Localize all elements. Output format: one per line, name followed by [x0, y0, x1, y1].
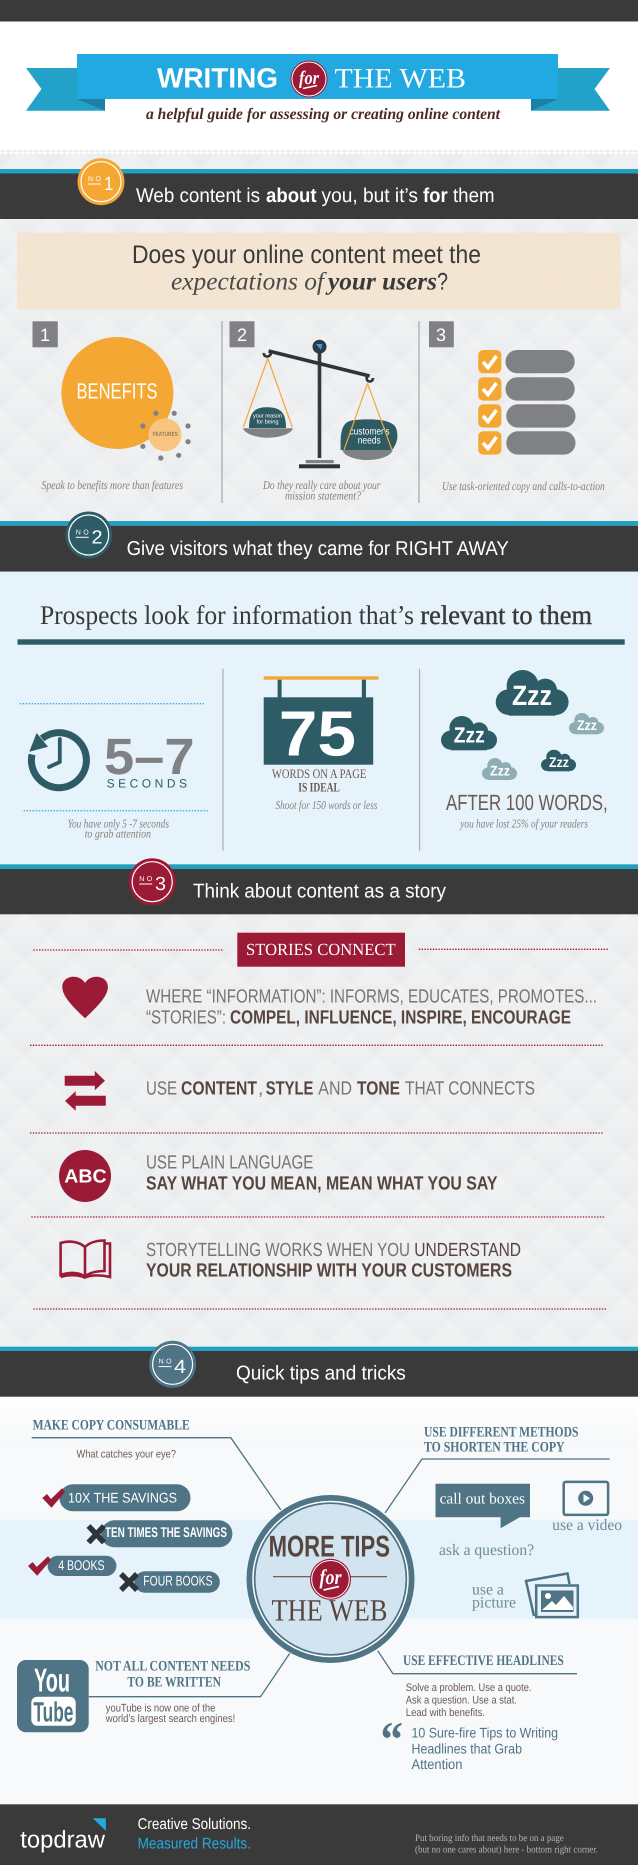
- title words: the web: THE WEB: [334, 64, 466, 94]
- badge: number 4: NO: [159, 1359, 172, 1366]
- badge: number 3: NO: [139, 876, 153, 883]
- question line 2: your users: [325, 268, 437, 296]
- body text: Lead with benefits.: [406, 1707, 485, 1719]
- panel: youtube: [17, 1659, 250, 1732]
- panel: beige question box: [17, 233, 621, 309]
- icon: small dark cloud: [541, 750, 576, 771]
- panel: section 1 background: [0, 154, 638, 524]
- section 4 heading: Quick tips and tricks: [236, 1362, 406, 1384]
- question line 2: expectations of: [171, 268, 327, 296]
- row: storytelling: [61, 1240, 521, 1282]
- tagline: Measured Results.: [138, 1835, 251, 1852]
- icon: heart: [62, 977, 108, 1018]
- section 2 heading: Give visitors what they came for RIGHT AWAY: [127, 538, 509, 560]
- label: [272, 766, 366, 795]
- text: ,: [258, 1078, 263, 1099]
- text: TONE: [357, 1078, 400, 1099]
- heading: [95, 1659, 250, 1690]
- icon: hanging sign: 75: [279, 698, 356, 770]
- dividers: [223, 669, 420, 851]
- right pan: customer's: [350, 426, 390, 437]
- heading: [424, 1425, 578, 1456]
- icon: mid cloud: [441, 716, 497, 750]
- panel: seconds: [20, 704, 209, 841]
- panel: effective headlines: [380, 1653, 564, 1772]
- section 1 heading: [136, 185, 494, 207]
- section 1 heading: for: [423, 185, 448, 207]
- number 3 box: [429, 321, 454, 347]
- tagline: Creative Solutions.: [138, 1816, 251, 1833]
- text: STORYTELLING WORKS WHEN YOU: [146, 1240, 410, 1261]
- title ribbon: [26, 54, 610, 111]
- panel: 75 words: [264, 676, 378, 812]
- section 1 heading: you, but it’s: [322, 185, 418, 207]
- question: What catches your eye?: [76, 1449, 176, 1461]
- badge: for: [290, 60, 328, 98]
- icon: big cloud: [496, 670, 569, 716]
- panel: clouds: [441, 670, 608, 830]
- icon: light cloud right: [569, 713, 604, 734]
- footer: [0, 1804, 638, 1865]
- question line 2: ?: [437, 268, 448, 296]
- section 3 header band: [0, 858, 638, 914]
- number 2 box: 2: [237, 325, 247, 345]
- text: THAT CONNECTS: [405, 1078, 535, 1099]
- badge: number 1: [78, 158, 124, 205]
- caption: You have only 5 -7 seconds: [68, 816, 169, 830]
- icon: video: [564, 1482, 608, 1515]
- stat: 5-7: 5–7: [104, 728, 194, 785]
- right pan: [341, 383, 397, 460]
- text: YOUR RELATIONSHIP WITH YOUR CUSTOMERS: [146, 1261, 512, 1282]
- icon: features circle with dots: FEATURES: [153, 431, 178, 438]
- section 2 rule: [18, 639, 625, 645]
- zigzag edge: [0, 150, 638, 154]
- left pan: for being: [256, 419, 278, 426]
- body text: [406, 1682, 532, 1719]
- pill: 4 books: 4 BOOKS: [58, 1557, 105, 1573]
- icon: open book: [61, 1240, 110, 1278]
- badge: number 3: 3: [155, 874, 166, 895]
- text: SAY WHAT YOU MEAN, MEAN WHAT YOU SAY: [146, 1173, 498, 1194]
- text: more tips: MORE TIPS: [269, 1531, 390, 1564]
- label: IS IDEAL: [298, 780, 340, 795]
- dotted dividers: [30, 1045, 607, 1309]
- body text: world’s largest search engines!: [105, 1713, 235, 1725]
- label: use a picture: use a: [472, 1581, 504, 1598]
- text: USE: [146, 1078, 177, 1099]
- icon: light cloud left: Zzz: [490, 762, 510, 778]
- text: the web: THE WEB: [272, 1592, 388, 1627]
- icon: youtube logo: [17, 1660, 89, 1732]
- panel: section 3 background: [0, 914, 638, 1347]
- icon: big cloud: Zzz: [512, 680, 552, 711]
- panel: benefits column: [32, 321, 191, 492]
- badge: number 4: 4: [174, 1357, 186, 1378]
- label: ask a question: ask a question?: [439, 1542, 534, 1559]
- label: use a picture: [472, 1581, 516, 1612]
- logo: topdraw: topdraw: [20, 1826, 106, 1853]
- number 1 box: [32, 321, 58, 347]
- question line 1: Does your online content meet the: [132, 241, 481, 269]
- pill: ten times the savings: [88, 1520, 232, 1547]
- caption: you have lost 25% of your readers: [460, 816, 588, 830]
- badge: number 3: [129, 858, 176, 905]
- badge: for: for: [299, 68, 320, 89]
- left pan: your reason: [253, 414, 282, 420]
- caption 2: [262, 478, 381, 502]
- icon: abc circle: ABC: [64, 1167, 107, 1188]
- text: “STORIES”:: [146, 1007, 226, 1028]
- icon: benefits circle: BENEFITS: [76, 378, 158, 403]
- heading: USE EFFECTIVE HEADLINES: [403, 1653, 564, 1669]
- section 3 heading: Think about content as a story: [193, 881, 446, 903]
- badge: for: for: [320, 1565, 342, 1589]
- title word: writing: WRITING: [157, 62, 278, 94]
- section 1 heading: them: [453, 185, 494, 207]
- icon: quote mark: “: [380, 1711, 403, 1767]
- section 1 heading: about: [266, 185, 317, 207]
- icon: small dark cloud: Zzz: [549, 754, 569, 770]
- quote text: Headlines that Grab: [412, 1740, 522, 1756]
- label: use a video: use a video: [552, 1517, 622, 1534]
- column dividers: [222, 321, 419, 503]
- pill: 10x the savings: 10X THE SAVINGS: [68, 1490, 177, 1506]
- section 4 header band: [0, 1341, 638, 1397]
- quote text: [412, 1725, 558, 1772]
- right pan: needs: [358, 435, 381, 446]
- icon: balance scale: [243, 340, 397, 468]
- heading: USE DIFFERENT METHODS: [424, 1425, 578, 1441]
- quote text: 10 Sure-fire Tips to Writing: [412, 1725, 558, 1741]
- section 1 header band: [0, 158, 638, 219]
- section 2 title: Prospects look for information that’s: [40, 600, 414, 630]
- icon: light cloud left: [482, 758, 517, 780]
- icon: exchange arrows: [65, 1071, 106, 1111]
- icon: picture frames: [526, 1574, 578, 1617]
- panel: checklist column: [429, 321, 605, 493]
- badge: number 2: 2: [92, 527, 102, 548]
- panel: scale column: [230, 321, 397, 502]
- left pan: [243, 358, 293, 438]
- section 2 header band: [0, 512, 638, 572]
- icon: abc circle: [59, 1150, 111, 1202]
- panel: make copy consumable: [28, 1417, 232, 1593]
- number 3 box: 3: [436, 325, 446, 345]
- text: CONTENT: [181, 1078, 257, 1099]
- caption 1: Speak to benefits more than features: [42, 478, 183, 492]
- heading: MAKE COPY CONSUMABLE: [33, 1417, 190, 1433]
- badge: for: [310, 1559, 351, 1600]
- badge: number 1: 1: [104, 174, 114, 195]
- question line 2: [171, 268, 448, 296]
- panel: section 2 background: [0, 572, 638, 864]
- caption: [68, 816, 169, 841]
- caption 2: Do they really care about your: [262, 478, 381, 492]
- heading: TO BE WRITTEN: [127, 1674, 221, 1690]
- row: content style tone: [65, 1071, 535, 1111]
- body text: Ask a question. Use a stat.: [406, 1694, 517, 1706]
- panel: center circle more tips: [246, 1495, 414, 1663]
- connector lines: [32, 1438, 610, 1697]
- caption 2: mission statement?: [285, 488, 361, 502]
- row: plain language: [59, 1150, 498, 1202]
- caption: to grab attention: [85, 827, 151, 841]
- number 2 box: [230, 321, 254, 347]
- badge: number 4: [149, 1341, 196, 1388]
- callout box: call out boxes: [440, 1491, 525, 1508]
- caption: Shoot for 150 words or less: [276, 798, 378, 812]
- text: [146, 1240, 521, 1282]
- icon: benefits circle: [61, 337, 173, 449]
- text: USE PLAIN LANGUAGE: [146, 1152, 313, 1173]
- top bar: [0, 0, 638, 22]
- label: seconds: SECONDS: [107, 777, 187, 791]
- pill: ten times the savings: TEN TIMES THE SAVINGS: [105, 1524, 227, 1540]
- heading: NOT ALL CONTENT NEEDS: [95, 1659, 250, 1675]
- icon: youtube logo: You: [34, 1662, 70, 1699]
- badge: number 1: NO: [88, 176, 102, 183]
- text: [146, 987, 597, 1028]
- tagline: [138, 1816, 251, 1852]
- body text: youTube is now one of the: [106, 1703, 215, 1715]
- badge: number 2: NO: [76, 529, 89, 536]
- panel: different methods: [424, 1425, 622, 1617]
- body text: [105, 1703, 235, 1725]
- icon: features circle with dots: [140, 411, 191, 461]
- text: [146, 1152, 498, 1194]
- stories connect banner: STORIES CONNECT: [246, 940, 396, 959]
- section 2 title: relevant to them: [420, 600, 592, 630]
- footer note: [415, 1833, 598, 1856]
- pill: four books: FOUR BOOKS: [143, 1572, 212, 1588]
- quote text: Attention: [412, 1756, 462, 1772]
- heading: TO SHORTEN THE COPY: [424, 1440, 565, 1456]
- text: [146, 1078, 535, 1099]
- callout box: [436, 1484, 530, 1528]
- pill: 10x the savings: [42, 1484, 190, 1511]
- footer note: Put boring info that needs to be on a page: [415, 1833, 564, 1844]
- footer note: (but no one cares about) here - bottom right corner.: [415, 1845, 598, 1856]
- icon: checklist: [478, 350, 576, 455]
- pill: 4 books: [28, 1556, 116, 1576]
- number 1 box: 1: [40, 325, 50, 345]
- pill: four books: [121, 1571, 220, 1593]
- text: AND: [318, 1078, 352, 1099]
- label: WORDS ON A PAGE: [272, 766, 366, 781]
- text: UNDERSTAND: [414, 1240, 521, 1261]
- stories connect banner: [33, 933, 609, 967]
- icon: light cloud right: Zzz: [577, 717, 597, 733]
- row: information vs stories: [62, 977, 597, 1028]
- badge: number 2: [65, 512, 112, 558]
- subtitle: a helpful guide for assessing or creating online content: [146, 106, 501, 123]
- panel: section 4 background: [0, 1396, 638, 1804]
- icon: youtube logo: Tube: [33, 1697, 73, 1728]
- icon: mid cloud: Zzz: [454, 723, 485, 748]
- label: use a picture: picture: [472, 1595, 516, 1612]
- section 1 heading: Web content is: [136, 185, 260, 207]
- text: STYLE: [266, 1078, 313, 1099]
- icon: clock: [29, 733, 86, 788]
- body text: Solve a problem. Use a quote.: [406, 1682, 532, 1694]
